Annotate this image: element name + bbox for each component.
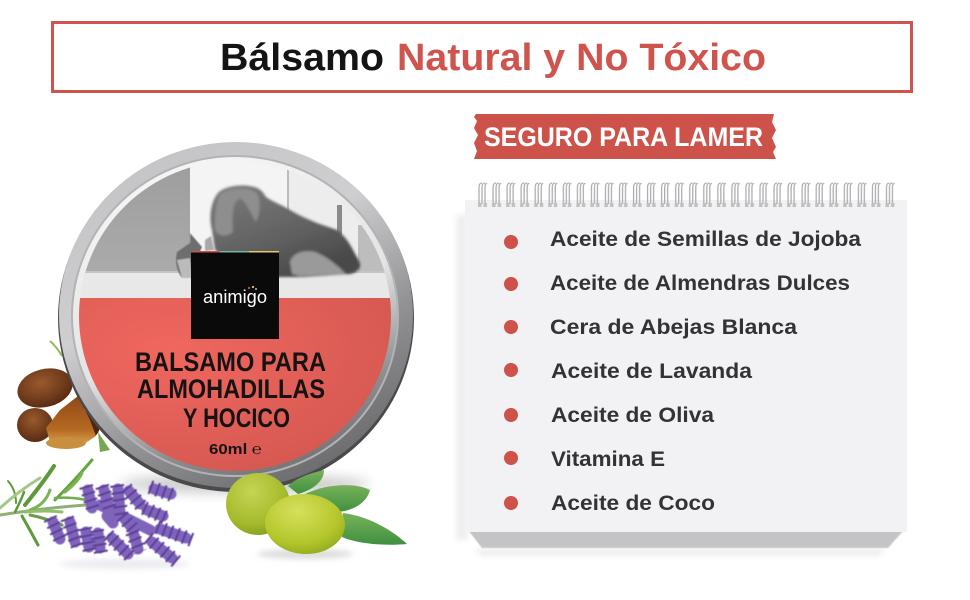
ingredient 4: Aceite de Lavanda (551, 360, 752, 383)
spiral binding (477, 182, 898, 209)
banner: seguro para lamer: SEGURO PARA LAMER (484, 122, 763, 152)
ingredient 3: Cera de Abejas Blanca (550, 316, 797, 339)
icon: rosemary (0, 460, 102, 545)
title: Bálsamo (220, 37, 384, 79)
banner: seguro para lamer (474, 114, 776, 159)
tin shadow (120, 475, 370, 493)
logo square: animigo (203, 287, 267, 307)
ingredient 6: Vitamina E (551, 448, 665, 471)
ingredient 2: Aceite de Almendras Dulces (550, 272, 850, 295)
photo: cat (176, 233, 214, 278)
product name: ALMOHADILLAS (137, 374, 325, 404)
tin label (79, 168, 391, 471)
ingredient list (504, 228, 861, 515)
tin lid rim (58, 144, 414, 492)
product name (135, 347, 326, 458)
product name: Y HOCICO (183, 403, 290, 433)
tin illustration (13, 142, 414, 493)
ingredient 5: Aceite de Oliva (551, 404, 714, 427)
product name: BALSAMO PARA (135, 347, 326, 377)
notebook (456, 182, 907, 556)
photo: dog (210, 186, 360, 277)
product name: 60ml ℮ (209, 441, 262, 458)
logo square (191, 251, 279, 339)
ingredient 1: Aceite de Semillas de Jojoba (550, 228, 861, 251)
title box (52, 22, 912, 92)
ingredient 6 (504, 448, 665, 471)
icon: dates (13, 341, 110, 452)
icon: lavender (50, 485, 192, 569)
ingredient 7: Aceite de Coco (551, 492, 715, 515)
icon: olives (226, 470, 407, 559)
title: Natural y No Tóxico (397, 37, 766, 79)
